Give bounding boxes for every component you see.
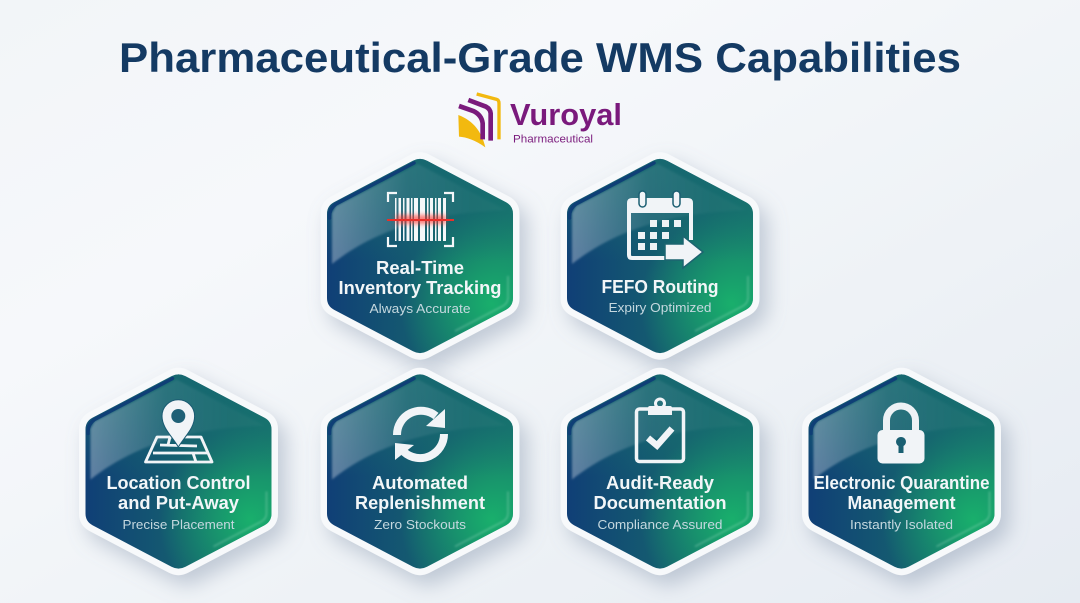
logo name: Vuroyal (510, 98, 622, 132)
icon: calendar with arrow (627, 191, 703, 268)
heading: Automated (372, 472, 468, 493)
heading: Location Control (106, 472, 250, 493)
subtitle: Zero Stockouts (374, 517, 467, 532)
hexagon badge (808, 374, 994, 569)
logo subtitle: Pharmaceutical (513, 134, 593, 146)
heading line 2: Replenishment (355, 492, 485, 513)
logo: Vuroyal Pharmaceutical (458, 94, 622, 147)
panel: real-time inventory tracking (327, 159, 513, 353)
heading: Electronic Quarantine (814, 472, 990, 493)
title: Pharmaceutical-Grade WMS Capabilities (119, 34, 961, 81)
icon: padlock (878, 406, 924, 464)
hexagon badge (567, 374, 753, 569)
subtitle: Instantly Isolated (850, 517, 953, 532)
icon: barcode scanner (387, 193, 454, 246)
panel: automated replenishment (327, 374, 513, 569)
panel: FEFO routing (567, 159, 753, 353)
panel: location control and put-away (86, 374, 272, 569)
heading: FEFO Routing (602, 276, 718, 297)
heading line 2: Inventory Tracking (338, 277, 502, 298)
panel: electronic quarantine management (808, 374, 994, 569)
hexagon badge (567, 159, 753, 353)
icon: refresh arrows (395, 409, 445, 460)
heading line 2: Documentation (594, 492, 726, 513)
hexagon badge (327, 374, 513, 569)
subtitle: Compliance Assured (598, 517, 722, 532)
icon: logo mark (458, 94, 499, 147)
hexagon badge (86, 374, 272, 569)
icon: map pin on floor plan (146, 400, 212, 462)
subtitle: Precise Placement (122, 517, 235, 532)
icon: clipboard with check (636, 399, 684, 462)
heading line 2: and Put-Away (118, 492, 240, 513)
subtitle: Always Accurate (370, 301, 470, 316)
heading line 2: Management (848, 492, 956, 513)
heading: Real-Time (376, 257, 464, 278)
heading: Audit-Ready (606, 472, 715, 493)
subtitle: Expiry Optimized (608, 300, 712, 315)
hexagon badge (327, 159, 513, 353)
panel: audit-ready documentation (567, 374, 753, 569)
